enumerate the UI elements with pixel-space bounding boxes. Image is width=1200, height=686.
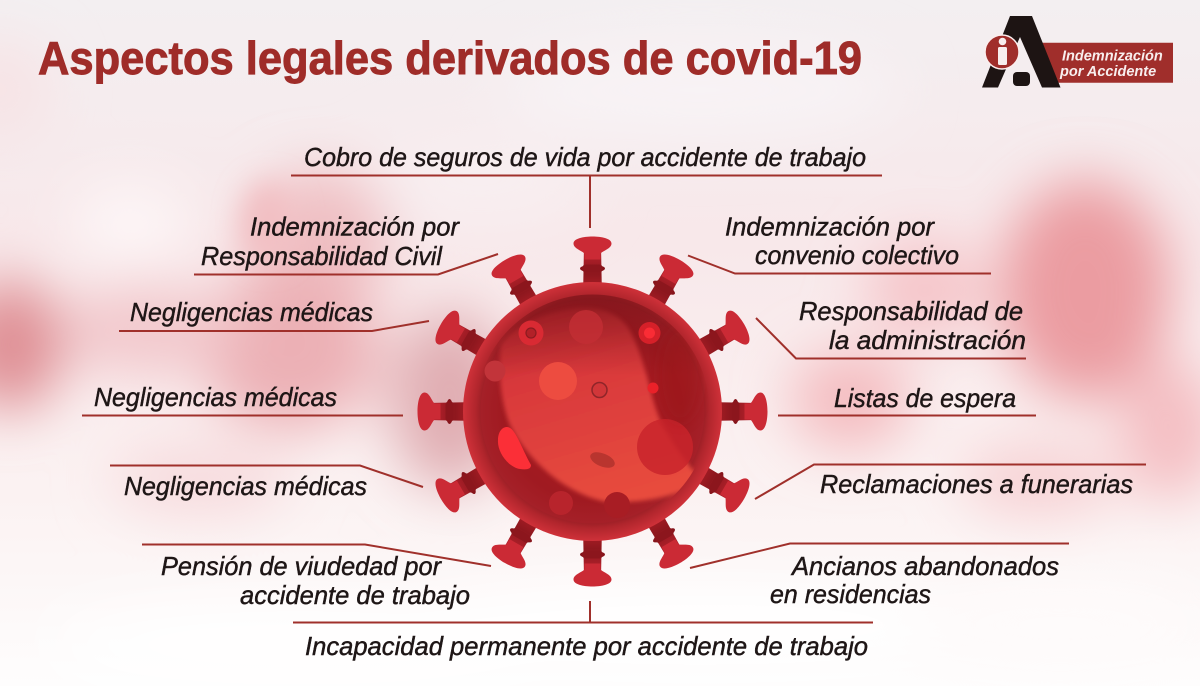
label: Negligencias médicas middle: Negligencias médicas <box>94 382 337 412</box>
label: Indemnización por Responsabilidad Civil: Responsabilidad Civil <box>201 241 443 271</box>
label: bottom: Incapacidad permanente por accidente de trabajo <box>305 631 868 661</box>
top blob <box>569 310 603 344</box>
sphere <box>480 300 704 524</box>
spikes <box>418 236 768 586</box>
label: Negligencias médicas lower: Negligencias médicas <box>124 471 367 501</box>
bottom blob <box>549 491 573 515</box>
label: Reclamaciones a funerarias: Reclamaciones a funerarias <box>820 469 1133 499</box>
label: top: Cobro de seguros de vida por accidente de trabajo <box>304 142 866 172</box>
ring dot center <box>592 382 607 398</box>
logo: Indemnización por Accidente <box>982 16 1173 88</box>
small red dot <box>648 382 658 394</box>
label: Indemnización por Responsabilidad Civil <box>194 212 498 274</box>
sphere details <box>484 294 700 515</box>
logo banner <box>1038 43 1173 83</box>
label: Responsabilidad de la administración: Responsabilidad de <box>799 296 1023 326</box>
upper-right dark shade <box>658 327 702 423</box>
label: bottom <box>293 601 873 661</box>
logo text: por Accidente <box>1059 64 1156 80</box>
bright glow spot <box>498 427 531 469</box>
label: Pensión de viudedad <box>142 544 491 610</box>
logo dot <box>1013 72 1030 86</box>
label: Responsabilidad de la administración <box>756 296 1026 358</box>
label: Pensión de viudedad: Pensión de viudedad por <box>161 551 442 581</box>
label: Responsabilidad de la administración: la administración <box>829 325 1026 355</box>
virus illustration <box>418 236 768 586</box>
logo i in circle <box>985 35 1019 69</box>
label: Ancianos abandonados <box>690 544 1069 609</box>
label: Indemnización por Responsabilidad Civil: Indemnización por <box>250 212 460 242</box>
orange circle <box>539 362 577 400</box>
ring dot left <box>518 320 544 346</box>
outer rim <box>463 282 722 541</box>
label: Pensión de viudedad: accidente de trabajo <box>240 580 470 610</box>
title: Aspectos legales derivados de covid-19 <box>38 32 862 84</box>
dark top shade <box>489 294 692 365</box>
red dot right <box>638 322 660 344</box>
left blob <box>484 360 506 382</box>
label: Ancianos abandonados: en residencias <box>770 579 931 609</box>
label: Negligencias médicas upper: Negligencias médicas <box>130 297 373 327</box>
label: Indemnización por convenio colectivo: Indemnización por <box>725 212 935 242</box>
label: Listas de espera: Listas de espera <box>834 383 1016 413</box>
label: Ancianos abandonados: Ancianos abandonados <box>790 551 1059 581</box>
logo text: Indemnización <box>1062 48 1163 64</box>
lower dark oval <box>590 452 615 468</box>
light crescent <box>500 308 700 502</box>
large dark circle <box>637 419 693 475</box>
bottom crater <box>604 492 630 504</box>
label: top <box>291 142 882 228</box>
label: Indemnización por convenio colectivo: convenio colectivo <box>755 240 959 270</box>
logo letter A <box>982 16 1060 88</box>
label: Negligencias médicas lower <box>110 466 423 501</box>
label: Indemnización por convenio colectivo <box>688 212 991 274</box>
